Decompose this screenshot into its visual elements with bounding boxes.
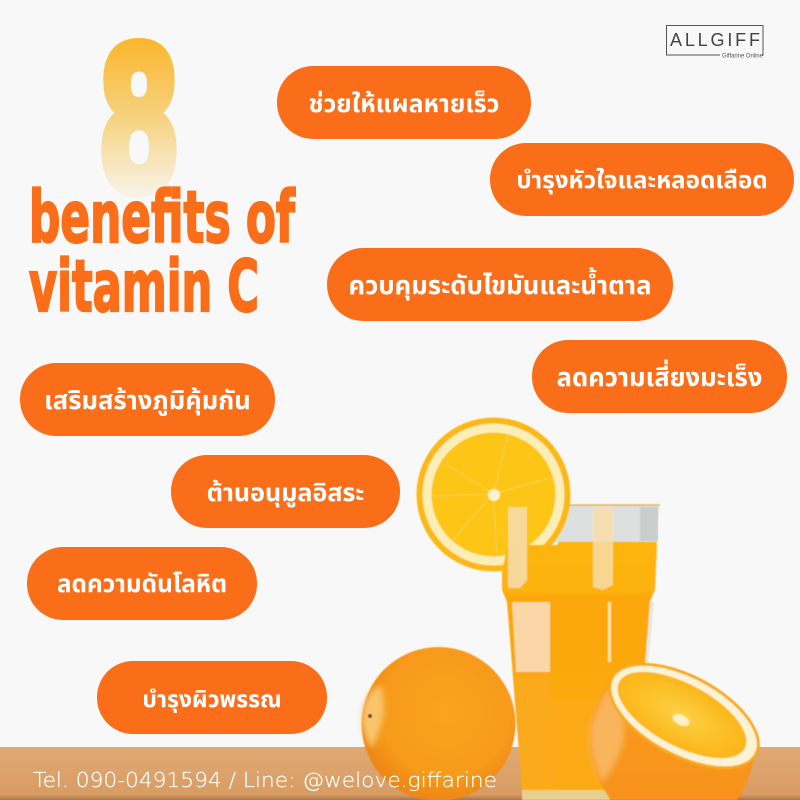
pill: builds immunity: เสริมสร้างภูมิคุ้มกัน — [44, 387, 251, 415]
pill: skin care: บำรุงผิวพรรณ — [142, 686, 282, 712]
icon: glass rim band — [507, 505, 660, 543]
heading text: vitamin C — [29, 245, 259, 328]
heading number 8: 8 — [97, 6, 181, 237]
pill: antioxidant — [171, 455, 400, 528]
pill: heals wounds — [277, 66, 531, 139]
logo: ALLGIFF Giffarine Online — [666, 26, 764, 60]
icon: whole orange — [362, 647, 516, 800]
pill: heals wounds: ช่วยให้แผลหายเร็ว — [309, 90, 499, 118]
wooden table — [0, 747, 800, 800]
icon: glass of orange juice — [502, 507, 657, 800]
pill: lowers blood pressure — [27, 547, 257, 620]
pill: lowers cancer risk: ลดความเสี่ยงมะเร็ง — [557, 364, 762, 392]
heading text: benefits of — [29, 176, 296, 259]
footer contact line: Tel. 090-0491594 / Line: @welove.giffarine — [33, 768, 497, 792]
logo: ALLGIFF Giffarine Online: ALLGIFF — [670, 30, 760, 50]
pill: heart and blood vessels — [490, 143, 794, 216]
icon: orange slice on glass rim — [416, 418, 570, 572]
pill: controls fat and sugar: ควบคุมระดับไขมันและน้ำตาล — [349, 272, 651, 300]
pill: lowers cancer risk — [532, 340, 787, 413]
pill: lowers blood pressure: ลดความดันโลหิต — [57, 571, 227, 598]
heading text — [29, 176, 296, 328]
pill: heart and blood vessels: บำรุงหัวใจและหลอดเลือด — [516, 167, 768, 194]
pill: skin care — [97, 661, 327, 734]
pill: antioxidant: ต้านอนุมูลอิสระ — [207, 479, 364, 507]
pill: controls fat and sugar — [327, 248, 673, 321]
icon: halved orange — [590, 641, 777, 800]
logo: ALLGIFF Giffarine Online: Giffarine Online — [722, 54, 764, 60]
pill: builds immunity — [20, 363, 275, 436]
